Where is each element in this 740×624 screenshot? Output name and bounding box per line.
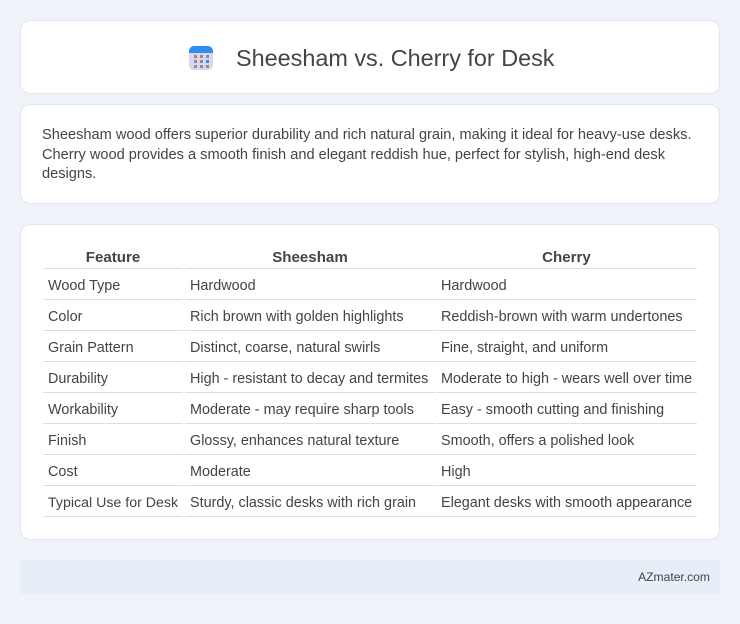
row: typical use for desk: Typical Use for Desk (48, 495, 178, 511)
panel: comparison table (20, 224, 720, 540)
table header: Sheesham (272, 249, 348, 266)
row: durability: Moderate to high - wears well over time (441, 371, 692, 387)
row: finish (48, 433, 634, 449)
row: typical use for desk: Sturdy, classic desks with rich grain (190, 495, 416, 511)
footer source text: AZmater.com (638, 570, 710, 584)
row: grain pattern: Distinct, coarse, natural swirls (190, 340, 380, 356)
row: finish: Smooth, offers a polished look (441, 433, 634, 449)
summary text: Sheesham wood offers superior durability and rich natural grain, making it ideal for heavy-use desks. (42, 127, 692, 143)
icon: calendar (189, 46, 213, 70)
row: workability: Workability (48, 402, 118, 418)
summary text (42, 127, 692, 182)
row: cost: Cost (48, 464, 78, 480)
summary text: designs. (42, 166, 96, 182)
row: typical use for desk: Elegant desks with smooth appearance (441, 495, 692, 511)
row: cost: High (441, 464, 471, 480)
table header (86, 249, 591, 266)
row: wood type: Hardwood (441, 278, 507, 294)
row: typical use for desk (48, 495, 692, 511)
row: durability: Durability (48, 371, 108, 387)
footer bar (20, 560, 720, 594)
row: workability: Moderate - may require sharp tools (190, 402, 414, 418)
row: workability (48, 402, 664, 418)
row: grain pattern: Grain Pattern (48, 340, 134, 356)
row: color: Rich brown with golden highlights (190, 309, 404, 325)
row: wood type: Hardwood (190, 278, 256, 294)
panel: summary card (20, 104, 720, 204)
row: cost: Moderate (190, 464, 251, 480)
row: color: Reddish-brown with warm undertones (441, 309, 683, 325)
row: finish: Finish (48, 433, 86, 449)
row: grain pattern: Fine, straight, and uniform (441, 340, 608, 356)
row: wood type (48, 278, 507, 294)
row: cost (48, 464, 471, 480)
table header: Feature (86, 249, 140, 266)
panel: title card (20, 20, 720, 94)
title: Sheesham vs. Cherry for Desk (236, 45, 554, 71)
row: color (48, 309, 683, 325)
row: durability: High - resistant to decay and termites (190, 371, 428, 387)
row: wood type: Wood Type (48, 278, 120, 294)
table header: Cherry (542, 249, 591, 266)
row: finish: Glossy, enhances natural texture (190, 433, 399, 449)
row: durability (48, 371, 692, 387)
summary text: Cherry wood provides a smooth finish and elegant reddish hue, perfect for stylish, high-end desk (42, 147, 665, 163)
row: workability: Easy - smooth cutting and finishing (441, 402, 664, 418)
row: grain pattern (48, 340, 608, 356)
row: color: Color (48, 309, 82, 325)
